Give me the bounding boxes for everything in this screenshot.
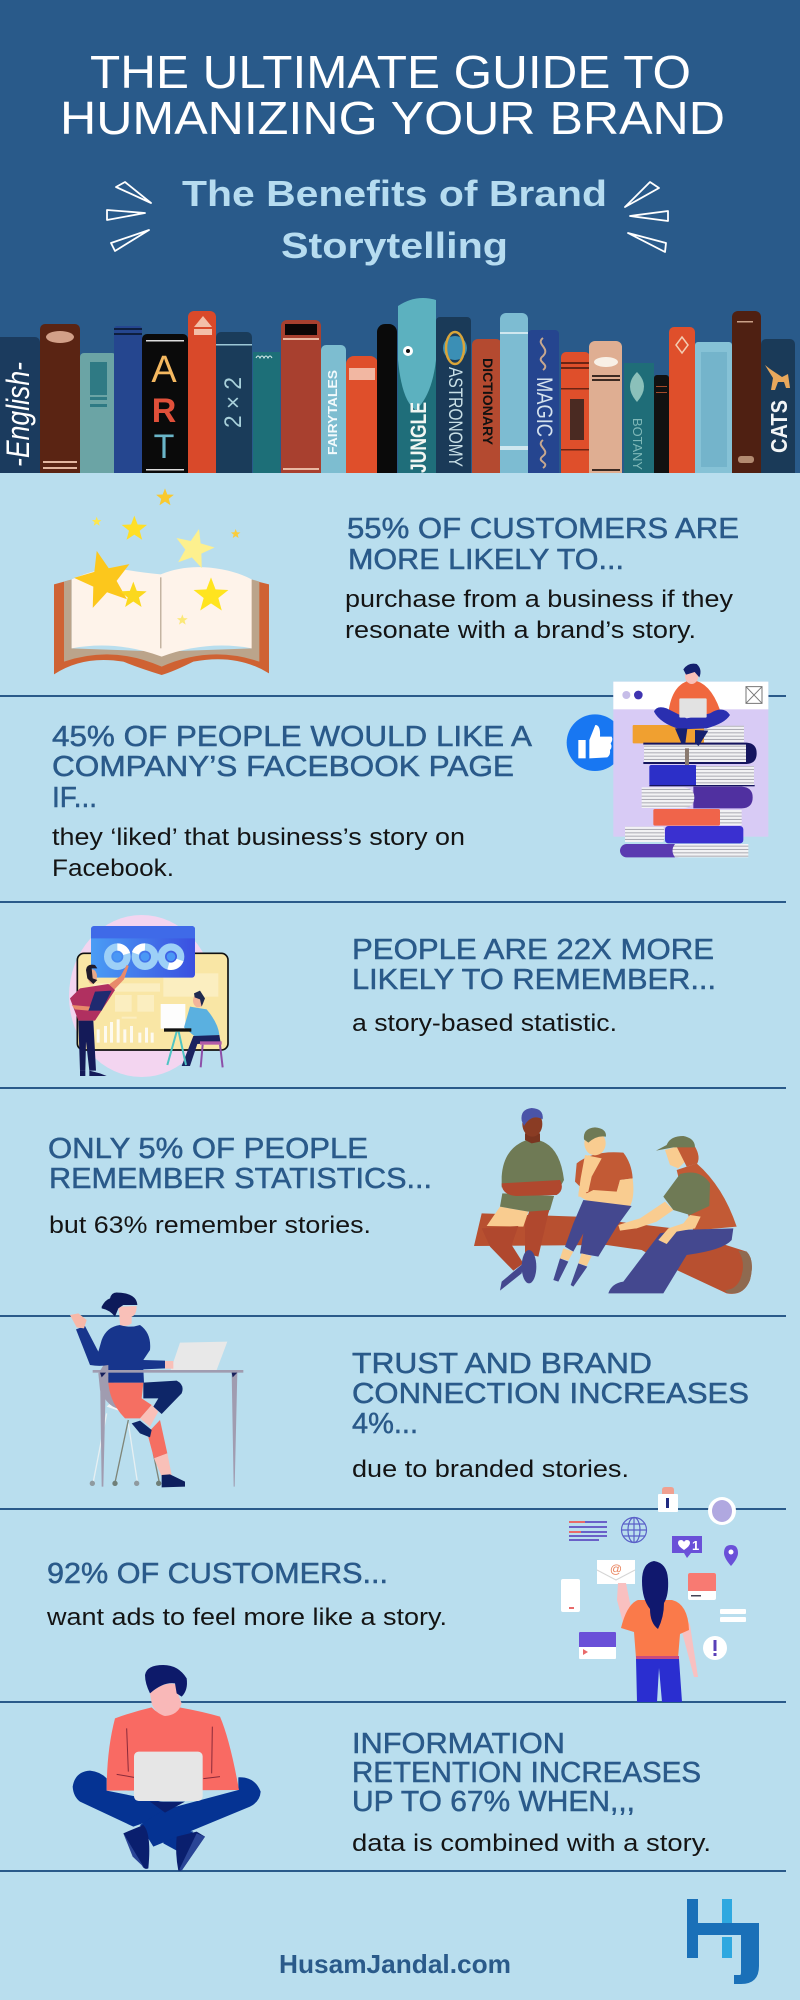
panel: trust and brand connection — [70, 1293, 749, 1487]
body text — [345, 586, 733, 644]
heading: 45% OF PEOPLE WOULD LIKE A — [52, 721, 533, 753]
body text: but 63% remember stories. — [49, 1212, 371, 1239]
book: blue — [114, 326, 142, 486]
heading: LIKELY TO REMEMBER... — [352, 964, 716, 996]
panel: 92% of customers — [46, 1487, 746, 1702]
book: Dictionary: DICTIONARY — [480, 358, 496, 446]
body background panel — [0, 473, 800, 2000]
body text: purchase from a business if they — [345, 586, 733, 613]
body text: due to branded stories. — [352, 1456, 629, 1483]
body text: resonate with a brand’s story. — [345, 617, 696, 644]
heading — [352, 934, 716, 996]
book: Astronomy: ASTRONOMY — [444, 367, 465, 467]
heading — [352, 1348, 749, 1440]
book: Fairy Tales: FAIRYTALES — [325, 370, 340, 455]
book: orange with label — [561, 352, 590, 487]
book: ART: A — [151, 349, 177, 391]
icon: facebook like — [567, 714, 623, 771]
heading: 92% OF CUSTOMERS... — [47, 1558, 388, 1590]
book: light blue — [695, 342, 732, 487]
heading: TRUST AND BRAND — [352, 1348, 652, 1380]
book: 2x2: 2 × 2 — [220, 377, 247, 428]
heading — [352, 1728, 701, 1818]
book: Magic — [528, 330, 559, 487]
book: dark brown — [732, 311, 761, 486]
heading: 4%... — [352, 1408, 418, 1440]
book: teal — [253, 352, 280, 482]
icon: right sparkle burst — [625, 182, 668, 252]
header panel background — [0, 0, 800, 480]
heading: COMPANY’S FACEBOOK PAGE — [52, 751, 514, 783]
book: red with diamond — [669, 327, 695, 487]
book: red — [188, 311, 216, 481]
book: Cats: CATS — [766, 400, 792, 453]
heading: ONLY 5% OF PEOPLE — [48, 1133, 368, 1165]
title — [60, 46, 725, 144]
subtitle: The Benefits of Brand — [182, 173, 607, 214]
heading: CONNECTION INCREASES — [352, 1378, 749, 1410]
book: ART: R — [152, 392, 176, 430]
book: black — [377, 324, 397, 484]
heading: IF... — [52, 782, 97, 814]
illustration: woman at desk — [70, 1293, 243, 1487]
heading: 55% OF CUSTOMERS ARE — [347, 513, 739, 545]
body text: Facebook. — [52, 855, 174, 882]
book: pale blue — [500, 313, 528, 488]
footer url: HusamJandal.com — [279, 1949, 511, 1979]
title: THE ULTIMATE GUIDE TO — [90, 46, 691, 98]
book: Dictionary — [472, 339, 502, 489]
book: English: -English- — [0, 362, 36, 467]
book: orange — [346, 356, 378, 486]
panel: information retention — [73, 1665, 711, 1871]
book: 2x2 — [216, 332, 252, 487]
book: Botany: BOTANY — [630, 418, 645, 470]
body text: want ads to feel more like a story. — [46, 1604, 447, 1631]
book: Cats — [761, 339, 795, 487]
panel: 45% of people — [52, 664, 768, 882]
illustration: woman with floating app icons — [561, 1487, 746, 1702]
panel: 55% of customers — [54, 488, 739, 675]
heading: REMEMBER STATISTICS... — [49, 1163, 432, 1195]
illustration: woman with floating app icons: 1 — [692, 1538, 699, 1553]
heading — [347, 513, 739, 576]
heading — [52, 721, 533, 814]
illustration: row of books — [0, 298, 795, 489]
book: Botany — [624, 363, 654, 488]
logo: HJ monogram — [687, 1899, 759, 1984]
book: Magic: MAGIC — [532, 377, 557, 437]
book: Jungle — [398, 298, 436, 485]
book: brick — [281, 320, 321, 485]
book: ART — [142, 334, 188, 484]
title: HUMANIZING YOUR BRAND — [60, 92, 725, 144]
book: Fairy Tales — [321, 345, 346, 485]
book: slim black — [654, 375, 669, 485]
body text: they ‘liked’ that business’s story on — [52, 824, 465, 851]
book: Jungle: JUNGLE — [406, 402, 431, 473]
heading: INFORMATION — [352, 1728, 565, 1760]
illustration: man with laptop sitting cross-legged — [73, 1665, 261, 1871]
section dividers — [0, 695, 786, 1872]
heading: UP TO 67% WHEN,,, — [352, 1786, 635, 1818]
body text: a story-based statistic. — [352, 1010, 617, 1037]
heading: PEOPLE ARE 22X MORE — [352, 934, 714, 966]
icon: left sparkle burst — [107, 182, 151, 251]
heading: RETENTION INCREASES — [352, 1757, 701, 1789]
subtitle: Storytelling — [281, 225, 508, 266]
panel: 22x more likely — [69, 915, 716, 1077]
body text — [52, 824, 465, 882]
illustration: dashboard team — [69, 915, 228, 1077]
illustration: woman with floating app icons: @ — [610, 1562, 622, 1576]
subtitle — [182, 173, 607, 266]
icon: open book with stars — [54, 488, 269, 675]
book: Astronomy — [436, 317, 471, 487]
book: brown — [40, 324, 80, 484]
illustration: person on stack of books — [613, 664, 768, 857]
illustration: three people on a log — [474, 1108, 752, 1294]
heading: MORE LIKELY TO... — [348, 544, 624, 576]
panel: only 5% remember statistics — [48, 1108, 752, 1294]
book: pale teal — [80, 353, 116, 483]
heading — [48, 1133, 432, 1195]
body text: data is combined with a story. — [352, 1830, 711, 1857]
book: tan — [589, 341, 622, 486]
book: ART: T — [154, 428, 174, 466]
